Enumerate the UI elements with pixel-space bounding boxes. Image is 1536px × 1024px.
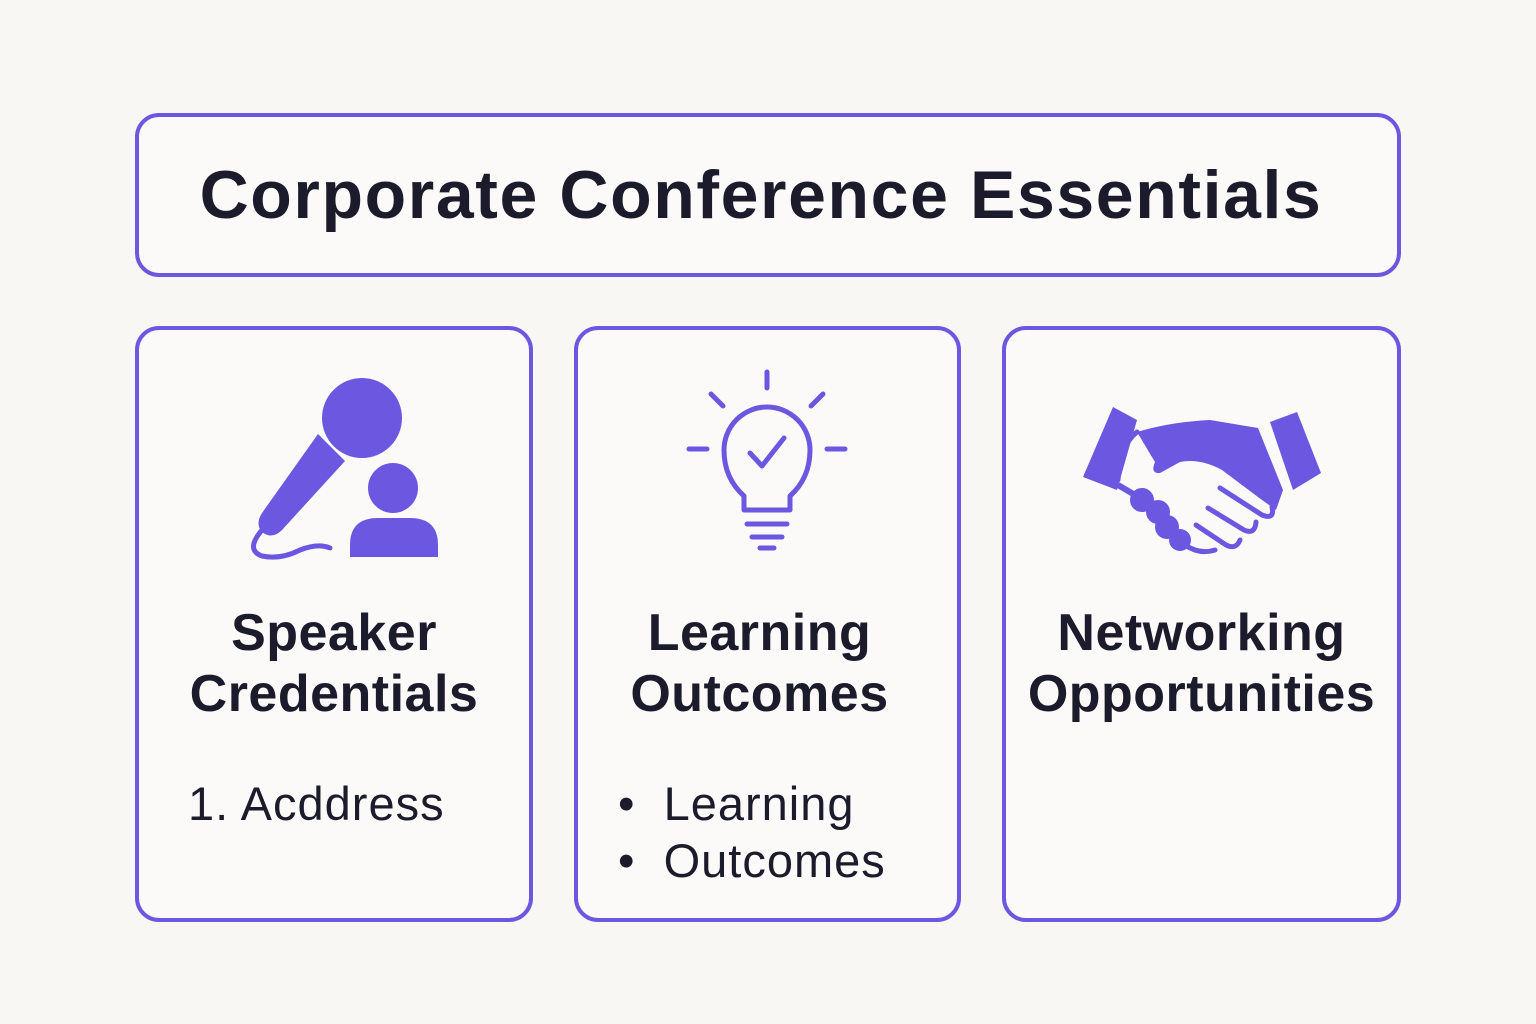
text: bullet list (618, 777, 886, 887)
heading: learning outcomes: Outcomes (630, 665, 889, 723)
heading: networking opportunities (1028, 604, 1375, 723)
panel: speaker credentials (135, 326, 533, 922)
icon: handshake (1083, 407, 1321, 552)
panel: networking opportunities (1002, 326, 1401, 922)
heading: learning outcomes (630, 604, 889, 723)
title (135, 113, 1401, 277)
text: bullet list: • Learning (618, 777, 854, 830)
heading: learning outcomes: Learning (648, 604, 871, 662)
icon: microphone and speaker (254, 378, 438, 557)
heading: speaker credentials: Credentials (190, 665, 478, 723)
text: numbered list: 1. Acddress (188, 777, 445, 830)
text: bullet list: • Outcomes (618, 834, 886, 887)
heading: speaker credentials (190, 604, 478, 723)
heading: networking opportunities: Networking (1057, 604, 1346, 662)
title: Corporate Conference Essentials (200, 157, 1322, 233)
icon: light bulb with check (689, 372, 845, 548)
heading: networking opportunities: Opportunities (1028, 665, 1375, 723)
heading: speaker credentials: Speaker (231, 604, 437, 662)
panel: learning outcomes (574, 326, 961, 922)
